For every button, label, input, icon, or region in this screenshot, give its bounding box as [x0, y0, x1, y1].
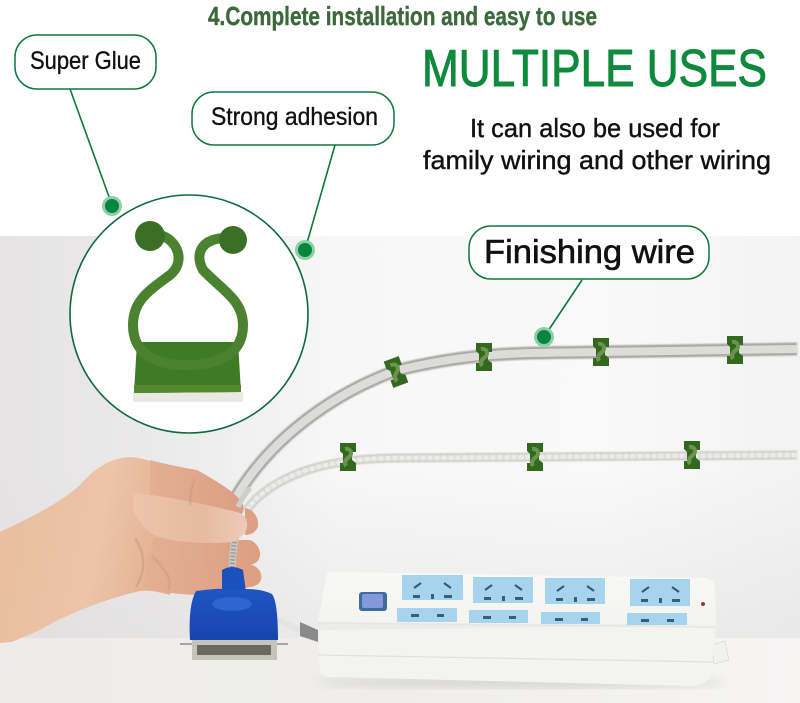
- title: 4.Complete installation and easy to use: [208, 1, 597, 31]
- middle finger: [150, 538, 260, 565]
- text block: description: family wiring and other wiring: [423, 145, 771, 175]
- switch: [359, 592, 387, 611]
- callout: super glue: Super Glue: [30, 47, 141, 75]
- finger creases: [152, 478, 195, 590]
- callout: strong adhesion: Strong adhesion: [211, 103, 378, 131]
- blue connector: [180, 567, 288, 660]
- hand holding connector: [0, 457, 288, 660]
- middle fingertip behind thumb: [245, 508, 258, 535]
- braided cable below thumb: [232, 515, 242, 568]
- thumb: [133, 493, 247, 543]
- panel: wall background: [0, 236, 800, 641]
- strip top face: [318, 572, 716, 625]
- text block: description: It can also be used for: [470, 113, 720, 143]
- thick grey cable: [236, 349, 797, 497]
- braided thin cable: [240, 455, 797, 520]
- grey cable reaching the hand: [238, 488, 250, 507]
- icon: green clip: [133, 221, 247, 402]
- wire clips: [340, 336, 743, 471]
- mounting tab: [712, 641, 729, 664]
- palm: [0, 457, 185, 643]
- power cord: [278, 620, 300, 630]
- callout: strong adhesion: [192, 92, 394, 260]
- text block: description: [423, 113, 771, 175]
- power strip: [278, 572, 729, 688]
- callout: finishing wire: [469, 226, 709, 347]
- panel: table surface: [0, 638, 800, 703]
- panel: clip magnified circle: [70, 195, 308, 433]
- cables: [236, 349, 797, 520]
- indicator light: [701, 602, 705, 606]
- ring finger: [143, 555, 261, 595]
- sockets: [397, 575, 690, 625]
- callout: finishing wire: Finishing wire: [484, 233, 695, 270]
- strip body: [318, 625, 716, 686]
- index finger: [150, 460, 243, 516]
- callout: super glue: [15, 35, 156, 216]
